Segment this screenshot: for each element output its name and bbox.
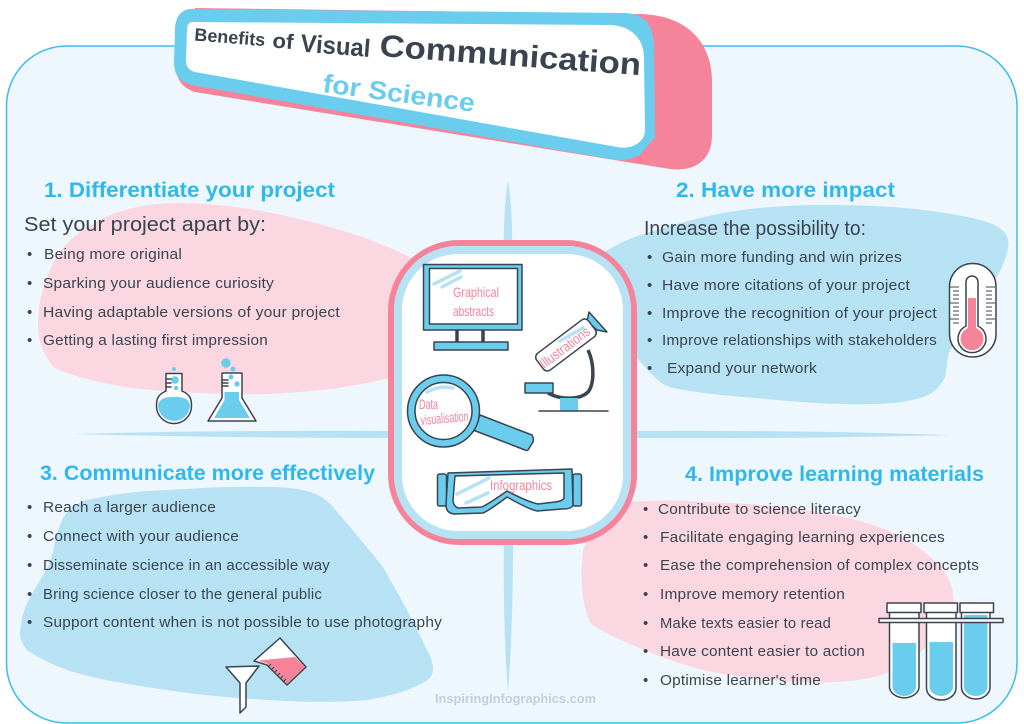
footer credit: InspiringInfographics.com bbox=[435, 691, 596, 706]
center inner border bbox=[398, 250, 627, 535]
list 4: • bbox=[643, 557, 648, 574]
round flask bbox=[156, 367, 192, 424]
heading 2: 2. Have more impact bbox=[676, 179, 895, 202]
list 1: • bbox=[27, 246, 32, 263]
list 1 bbox=[27, 246, 341, 349]
icon: monitor graphical abstracts bbox=[424, 264, 522, 350]
list 4: Improve memory retention bbox=[660, 586, 845, 603]
icon: goggles infographics: Infographics bbox=[490, 477, 552, 493]
subtitle text: for Science bbox=[321, 68, 477, 118]
banner blue frame bbox=[174, 9, 655, 160]
list 2: • bbox=[647, 249, 652, 266]
icon: goggles infographics bbox=[438, 469, 582, 514]
section 3: communicate bbox=[27, 462, 442, 631]
list 1: Sparking your audience curiosity bbox=[43, 275, 274, 292]
icon: magnifier data visualisation: Data bbox=[419, 396, 438, 412]
icon: test tubes bbox=[879, 603, 1003, 700]
list 4 bbox=[643, 501, 979, 689]
icon: flasks bbox=[156, 358, 256, 424]
subheading 2: Increase the possibility to: bbox=[644, 218, 866, 240]
list 1: Having adaptable versions of your project bbox=[43, 304, 341, 321]
list 3: Disseminate science in an accessible way bbox=[43, 557, 330, 574]
list 3: • bbox=[27, 499, 32, 516]
banner white inner bbox=[186, 22, 645, 148]
list 2: Improve the recognition of your project bbox=[662, 305, 938, 322]
cross divider bbox=[72, 180, 952, 692]
list 4: • bbox=[643, 501, 648, 518]
list 4: • bbox=[643, 529, 648, 546]
list 4: • bbox=[643, 586, 648, 603]
icon: magnifier data visualisation: visualisation bbox=[420, 408, 469, 428]
icon: microscope illustrations bbox=[525, 312, 608, 411]
icon: thermometer bbox=[950, 264, 996, 357]
banner pink shadow bbox=[177, 8, 712, 169]
list 3: Connect with your audience bbox=[43, 528, 239, 545]
list 2: • bbox=[647, 305, 652, 322]
list 4: • bbox=[643, 643, 648, 660]
section 4: learning materials bbox=[643, 463, 984, 689]
icon: microscope illustrations: Illustrations bbox=[536, 323, 593, 371]
list 2: • bbox=[647, 360, 652, 377]
list 2: Gain more funding and win prizes bbox=[662, 249, 902, 266]
list 3: • bbox=[27, 557, 32, 574]
subheading 1: Set your project apart by: bbox=[24, 214, 266, 236]
list 2: Improve relationships with stakeholders bbox=[662, 332, 937, 349]
icon: monitor graphical abstracts: Graphical bbox=[453, 284, 499, 300]
list 1: Being more original bbox=[44, 246, 182, 263]
title text: Visual bbox=[300, 30, 372, 63]
list 4: Optimise learner's time bbox=[660, 672, 821, 689]
list 1: • bbox=[27, 304, 32, 321]
blob: pink bottom right bbox=[582, 500, 953, 682]
section 1: differentiate bbox=[24, 179, 341, 349]
list 4: • bbox=[643, 672, 648, 689]
blob: pink top left bbox=[38, 203, 420, 394]
list 2: Have more citations of your project bbox=[662, 277, 911, 294]
list 4: Facilitate engaging learning experiences bbox=[660, 529, 945, 546]
list 3: • bbox=[27, 614, 32, 631]
center panel bbox=[391, 243, 634, 542]
list 2: Expand your network bbox=[667, 360, 817, 377]
list 2: • bbox=[647, 332, 652, 349]
title text: Benefits bbox=[194, 25, 266, 50]
heading 4: 4. Improve learning materials bbox=[685, 463, 984, 486]
blob: blue top right bbox=[600, 205, 1008, 404]
list 4: Have content easier to action bbox=[660, 643, 865, 660]
title text: Communication bbox=[378, 28, 642, 82]
heading 1: 1. Differentiate your project bbox=[44, 179, 335, 202]
beaker bbox=[254, 638, 306, 685]
list 3: • bbox=[27, 528, 32, 545]
icon: monitor graphical abstracts: abstracts bbox=[453, 303, 494, 319]
list 3: • bbox=[27, 586, 32, 603]
icon: funnel and beaker bbox=[226, 638, 306, 713]
list 1: • bbox=[27, 332, 32, 349]
list 4: Ease the comprehension of complex concepts bbox=[660, 557, 979, 574]
list 1: Getting a lasting first impression bbox=[43, 332, 268, 349]
title banner bbox=[174, 8, 712, 169]
section 2: impact bbox=[644, 179, 938, 377]
heading 3: 3. Communicate more effectively bbox=[40, 462, 375, 485]
title text: of bbox=[272, 30, 295, 54]
conical flask bbox=[208, 358, 256, 421]
list 1: • bbox=[27, 275, 32, 292]
title text bbox=[194, 25, 642, 82]
list 3: Support content when is not possible to use photography bbox=[43, 614, 442, 631]
list 3: Bring science closer to the general public bbox=[43, 586, 322, 603]
list 3: Reach a larger audience bbox=[43, 499, 216, 516]
list 3 bbox=[27, 499, 442, 631]
list 4: Make texts easier to read bbox=[660, 615, 831, 632]
icon: magnifier data visualisation bbox=[408, 375, 533, 450]
list 2 bbox=[647, 249, 938, 377]
center frame bbox=[391, 243, 634, 542]
list 4: Contribute to science literacy bbox=[658, 501, 861, 518]
list 2: • bbox=[647, 277, 652, 294]
funnel bbox=[226, 666, 259, 713]
list 4: • bbox=[643, 615, 648, 632]
blob: blue bottom left bbox=[20, 487, 433, 702]
